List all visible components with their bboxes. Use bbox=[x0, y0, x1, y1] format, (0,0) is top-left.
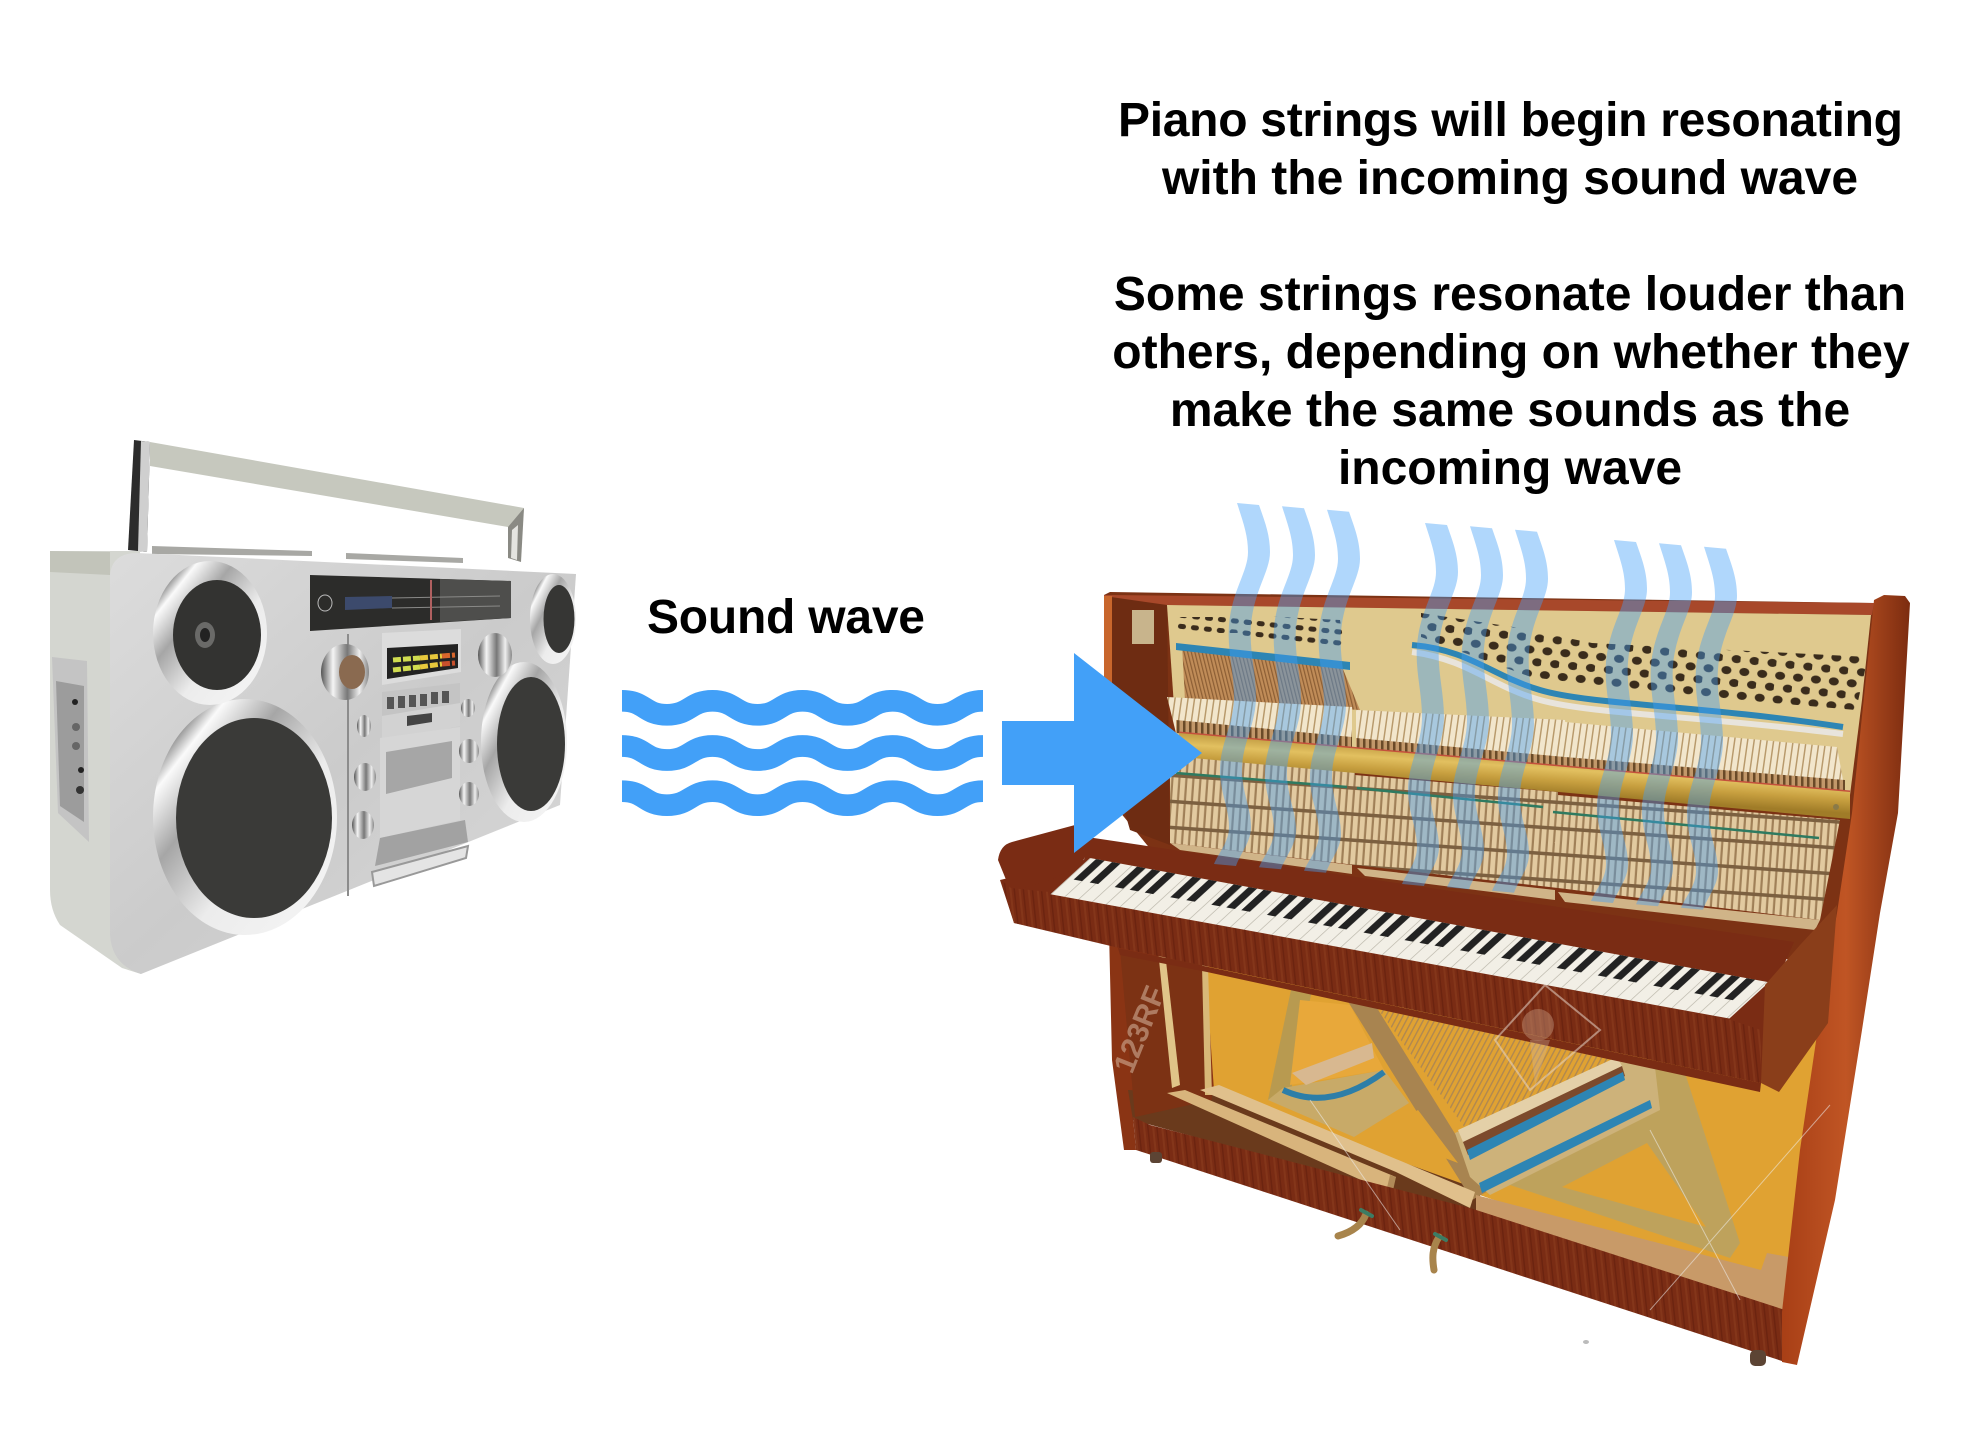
upper case back bbox=[1104, 592, 1874, 965]
dark cavity behind the levers bbox=[1128, 1090, 1480, 1215]
iron frame and strings in lower case bbox=[1268, 985, 1740, 1258]
boombox handle bbox=[128, 440, 524, 563]
right tuning pins bbox=[1421, 613, 1868, 710]
small speck bbox=[1583, 1340, 1589, 1344]
explanation text: incoming wave bbox=[1338, 442, 1682, 495]
action below the rail bbox=[1170, 755, 1840, 930]
left arm of the keyboard bbox=[998, 825, 1090, 892]
right felt strip bbox=[1412, 645, 1843, 734]
explanation text: with the incoming sound wave bbox=[1161, 152, 1858, 205]
left strings bbox=[1182, 645, 1360, 710]
fallboard and base behind the keys bbox=[1000, 837, 1794, 1083]
right side post bbox=[1782, 595, 1910, 1365]
upper hammers bbox=[1167, 697, 1845, 791]
resonating waves: group 3 bbox=[1591, 540, 1737, 910]
red felt line bbox=[1179, 733, 1850, 792]
resonating waves: group 2 bbox=[1402, 523, 1548, 893]
level meter lights bbox=[393, 655, 455, 670]
explanation text: others, depending on whether they bbox=[1112, 326, 1910, 379]
white keys bbox=[1050, 858, 1769, 1019]
feet bbox=[1150, 1152, 1766, 1366]
speaker: large left bbox=[153, 699, 337, 935]
explanation text: make the same sounds as the bbox=[1170, 384, 1850, 437]
speaker: small right bbox=[530, 574, 576, 664]
bottom rail bbox=[1133, 1117, 1785, 1362]
bottom board bbox=[1476, 1195, 1794, 1312]
key slip bbox=[1001, 880, 1761, 1083]
speaker: large right bbox=[481, 662, 567, 822]
left tuning pins bbox=[1176, 615, 1345, 650]
explanation text: Some strings resonate louder than bbox=[1114, 268, 1906, 321]
left felt strip bbox=[1176, 643, 1350, 670]
left wood panel bbox=[1104, 596, 1170, 845]
top rail of the case bbox=[1104, 595, 1874, 615]
boombox bbox=[50, 440, 576, 974]
gold rail bbox=[1179, 733, 1850, 819]
chrome knobs bbox=[321, 633, 512, 839]
piano lower case left side bbox=[1109, 930, 1215, 1150]
display panel bbox=[310, 575, 511, 631]
resonating waves: group 1 bbox=[1214, 503, 1360, 873]
explanation text bbox=[1112, 94, 1910, 495]
keyboard bbox=[1050, 858, 1769, 1019]
inner left panel bbox=[1120, 950, 1212, 1117]
soundboard bbox=[1205, 960, 1830, 1300]
piano bbox=[998, 503, 1910, 1366]
big arrow bbox=[1002, 653, 1202, 853]
speaker: small left bbox=[153, 561, 267, 705]
sound wave lines bbox=[622, 701, 983, 805]
harp soundboard cream bbox=[1167, 605, 1871, 795]
boombox side panel bbox=[50, 551, 141, 974]
under-key panel bbox=[1118, 948, 1761, 1092]
pedal trap levers bbox=[1167, 1085, 1475, 1208]
black keys bbox=[1068, 858, 1769, 1003]
button row bbox=[387, 691, 449, 709]
sound wave label: Sound wave bbox=[647, 591, 925, 644]
centre control column bbox=[348, 629, 468, 896]
boombox front face bbox=[110, 553, 576, 974]
right cheek block bbox=[1761, 905, 1837, 1092]
watermark: 123RF bbox=[1108, 982, 1172, 1078]
pedals bbox=[1338, 1210, 1446, 1270]
explanation text: Piano strings will begin resonating bbox=[1118, 94, 1903, 147]
watermark bbox=[1108, 982, 1830, 1310]
